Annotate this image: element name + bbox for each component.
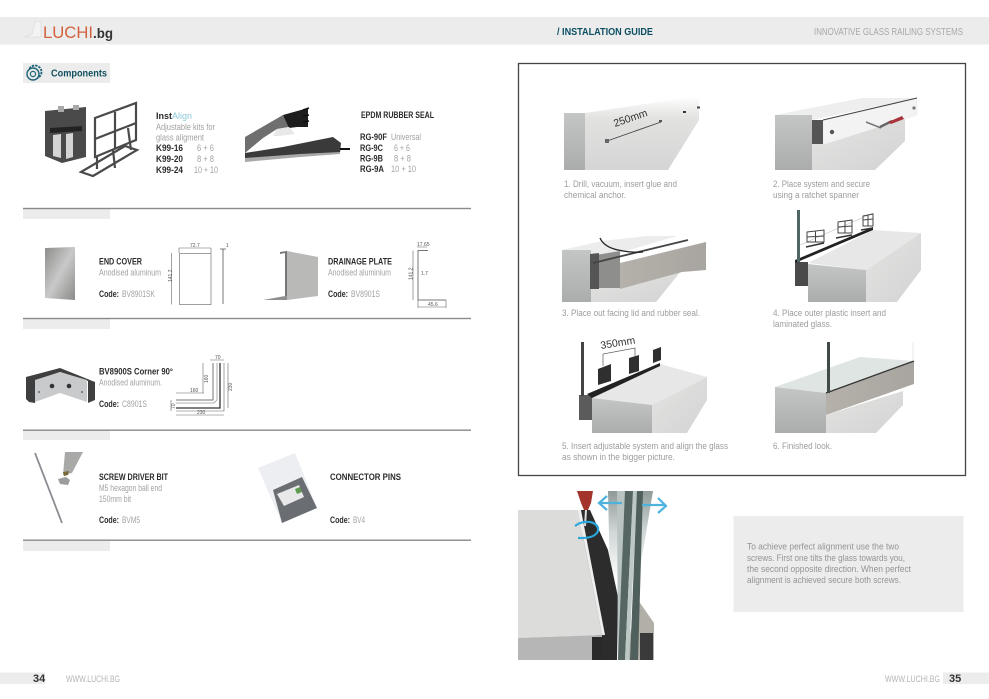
- caption 1: [564, 179, 677, 201]
- caption 4: [773, 308, 886, 330]
- text: EPDM seal: [360, 110, 434, 174]
- step 5: [562, 335, 728, 463]
- text: EPDM seal: 6 + 6: [394, 143, 410, 153]
- text: connector pins: Code:: [330, 515, 350, 525]
- footer right: [885, 672, 989, 685]
- step 2: [773, 98, 917, 201]
- illustration: glass alignment close-up: [518, 491, 666, 660]
- components heading: Components: [51, 68, 108, 80]
- section divider 3: [23, 430, 471, 440]
- note panel: To achieve perfect alignment use the two: [747, 540, 899, 552]
- components heading: [23, 63, 110, 83]
- technical drawing: corner: 70: [215, 355, 221, 361]
- technical drawing: drainage plate: 141.2: [408, 267, 414, 280]
- text: screw driver bit: Code:: [99, 515, 119, 525]
- footer left: [0, 672, 120, 685]
- header band: [0, 17, 989, 44]
- caption 4: 4. Place outer plastic insert and: [773, 308, 886, 319]
- section divider 1: [23, 208, 471, 219]
- icon: corner bracket: [26, 368, 95, 403]
- illustration: lid and seal: [562, 236, 706, 302]
- illustration: ratchet spanner: [775, 98, 917, 170]
- caption 5: as shown in the bigger picture.: [562, 452, 675, 463]
- illustration: glass and frames: [795, 210, 921, 302]
- text: end cover: Code:: [99, 289, 119, 299]
- technical drawing: drainage plate: 17.65: [417, 242, 430, 248]
- footer right: 35: [949, 673, 961, 685]
- panel: installation steps: [518, 64, 966, 476]
- step 3: [562, 236, 706, 319]
- logo: [25, 21, 113, 42]
- text: InstAlign: K99-20: [156, 154, 183, 164]
- product: drainage plate: [263, 242, 446, 308]
- text: end cover: BV8901SK: [122, 289, 155, 299]
- text: drainage plate: DRAINAGE PLATE: [328, 256, 392, 266]
- illustration: adjustable system: [579, 335, 707, 433]
- caption 5: 5. Insert adjustable system and align the glass: [562, 441, 728, 452]
- text: EPDM seal: RG-9B: [360, 154, 383, 164]
- icon: rubber seal: [245, 108, 350, 162]
- text: connector pins: [330, 472, 401, 525]
- icon: alignment frame: [81, 103, 137, 176]
- text: corner 90: BV8900S Corner 90°: [99, 366, 173, 376]
- text: drainage plate: Code:: [328, 289, 348, 299]
- technical drawing: corner: 160: [204, 374, 210, 383]
- text: InstAlign: 10 + 10: [194, 165, 218, 175]
- text: EPDM seal: 8 + 8: [394, 154, 411, 164]
- text: drainage plate: Anodised aluminium: [328, 268, 391, 278]
- icon: adjustable kit plate: [45, 105, 86, 163]
- text: InstAlign: K99-16: [156, 143, 183, 153]
- caption 2: using a ratchet spanner: [773, 190, 860, 201]
- text: InstAlign: [156, 111, 218, 175]
- text: screw driver bit: [99, 472, 169, 525]
- text: connector pins: CONNECTOR PINS: [330, 472, 401, 482]
- caption 2: 2. Place system and secure: [773, 179, 870, 190]
- text: corner 90: [99, 366, 173, 409]
- text: end cover: END COVER: [99, 256, 143, 266]
- footer left: 34: [33, 673, 46, 685]
- caption 5: [562, 441, 728, 463]
- technical drawing: drainage plate: 1.7: [421, 271, 428, 277]
- illustration: drilling anchors: 250mm: [612, 107, 649, 130]
- product: corner 90: [26, 355, 234, 416]
- step 6: [773, 342, 914, 452]
- text: InstAlign: 8 + 8: [197, 154, 214, 164]
- text: EPDM seal: RG-9C: [360, 143, 384, 153]
- text: corner 90: Anodised aluminum.: [99, 378, 162, 388]
- caption 6: 6. Finished look.: [773, 441, 832, 452]
- logo: .bg: [93, 26, 113, 41]
- note panel: screws. First one tilts the glass towards you,: [747, 552, 905, 563]
- icon: end cover plate: [45, 247, 75, 300]
- technical drawing: end cover: 72.7: [190, 243, 200, 249]
- text: screw driver bit: M5 hexagon ball end: [99, 483, 162, 493]
- icon: drainage plate: [263, 251, 318, 300]
- footer left: WWW.LUCHI.BG: [66, 674, 120, 684]
- arrow: right: [642, 498, 666, 513]
- product: end cover: [45, 243, 229, 304]
- note panel: the second opposite direction. When perfect: [747, 563, 911, 574]
- text: InstAlign: glass aligment: [156, 132, 204, 142]
- text: drainage plate: BV8901S: [351, 289, 380, 299]
- text: InstAlign: InstAlign: [156, 111, 192, 121]
- section divider 4: [23, 540, 471, 551]
- text: corner 90: C8901S: [122, 399, 147, 409]
- text: EPDM seal: RG-90F: [360, 132, 388, 142]
- text: screw driver bit: BVM5: [122, 515, 140, 525]
- footer right: WWW.LUCHI.BG: [885, 674, 940, 684]
- technical drawing: corner: 230: [197, 410, 206, 416]
- arrow: left: [599, 496, 622, 510]
- technical drawing: corner: 230: [228, 382, 234, 391]
- text: end cover: [99, 256, 161, 299]
- caption 4: laminated glass.: [773, 319, 832, 330]
- note panel: alignment is achieved secure both screws.: [747, 574, 901, 585]
- technical drawing: end cover: 141.2: [168, 269, 174, 282]
- step 4: [773, 210, 921, 330]
- text: end cover: Anodised aluminum: [99, 268, 161, 278]
- arrow: rotate: [575, 522, 598, 538]
- text: EPDM seal: RG-9A: [360, 164, 385, 174]
- technical drawing: corner: 70: [171, 403, 177, 409]
- product: connector pins: [258, 453, 401, 525]
- icon: screw driver bit: [35, 452, 83, 523]
- step 1: [564, 96, 700, 201]
- caption 1: 1. Drill, vacuum, insert glue and: [564, 179, 677, 190]
- illustration: finished look: [775, 342, 914, 433]
- text: InstAlign: K99-24: [156, 165, 183, 175]
- text: InstAlign: 6 + 6: [197, 143, 214, 153]
- technical drawing: drainage plate: 45.6: [428, 302, 438, 308]
- section divider 2: [23, 318, 471, 329]
- technical drawing: drainage plate: [408, 242, 446, 308]
- technical drawing: corner: [171, 355, 234, 416]
- text: connector pins: BV4: [353, 515, 365, 525]
- note panel: [734, 516, 964, 612]
- illustration: adjustable system: 350mm: [600, 335, 636, 352]
- text: InstAlign: Adjustable kits for: [156, 122, 215, 132]
- text: screw driver bit: SCREW DRIVER BIT: [99, 472, 169, 482]
- text: EPDM seal: 10 + 10: [391, 164, 416, 174]
- product: screw driver bit: [35, 452, 169, 525]
- logo: LUCHI: [43, 23, 93, 42]
- caption 1: chemical anchor.: [564, 190, 626, 201]
- text: EPDM seal: EPDM RUBBER SEAL: [361, 110, 434, 120]
- technical drawing: end cover: [168, 243, 229, 304]
- caption 3: 3. Place out facing lid and rubber seal.: [562, 308, 700, 319]
- page heading: / INSTALATION GUIDE: [557, 27, 653, 38]
- text: screw driver bit: 150mm bit: [99, 494, 131, 504]
- product: InstAlign kit: [45, 103, 218, 176]
- technical drawing: corner: 160: [190, 388, 199, 394]
- text: corner 90: Code:: [99, 399, 119, 409]
- caption 2: [773, 179, 870, 201]
- text: EPDM seal: Universal: [391, 132, 421, 142]
- text: drainage plate: [328, 256, 392, 299]
- icon: pin bag: [258, 453, 317, 523]
- product: EPDM rubber seal: [245, 108, 434, 174]
- technical drawing: end cover: 1: [226, 243, 229, 249]
